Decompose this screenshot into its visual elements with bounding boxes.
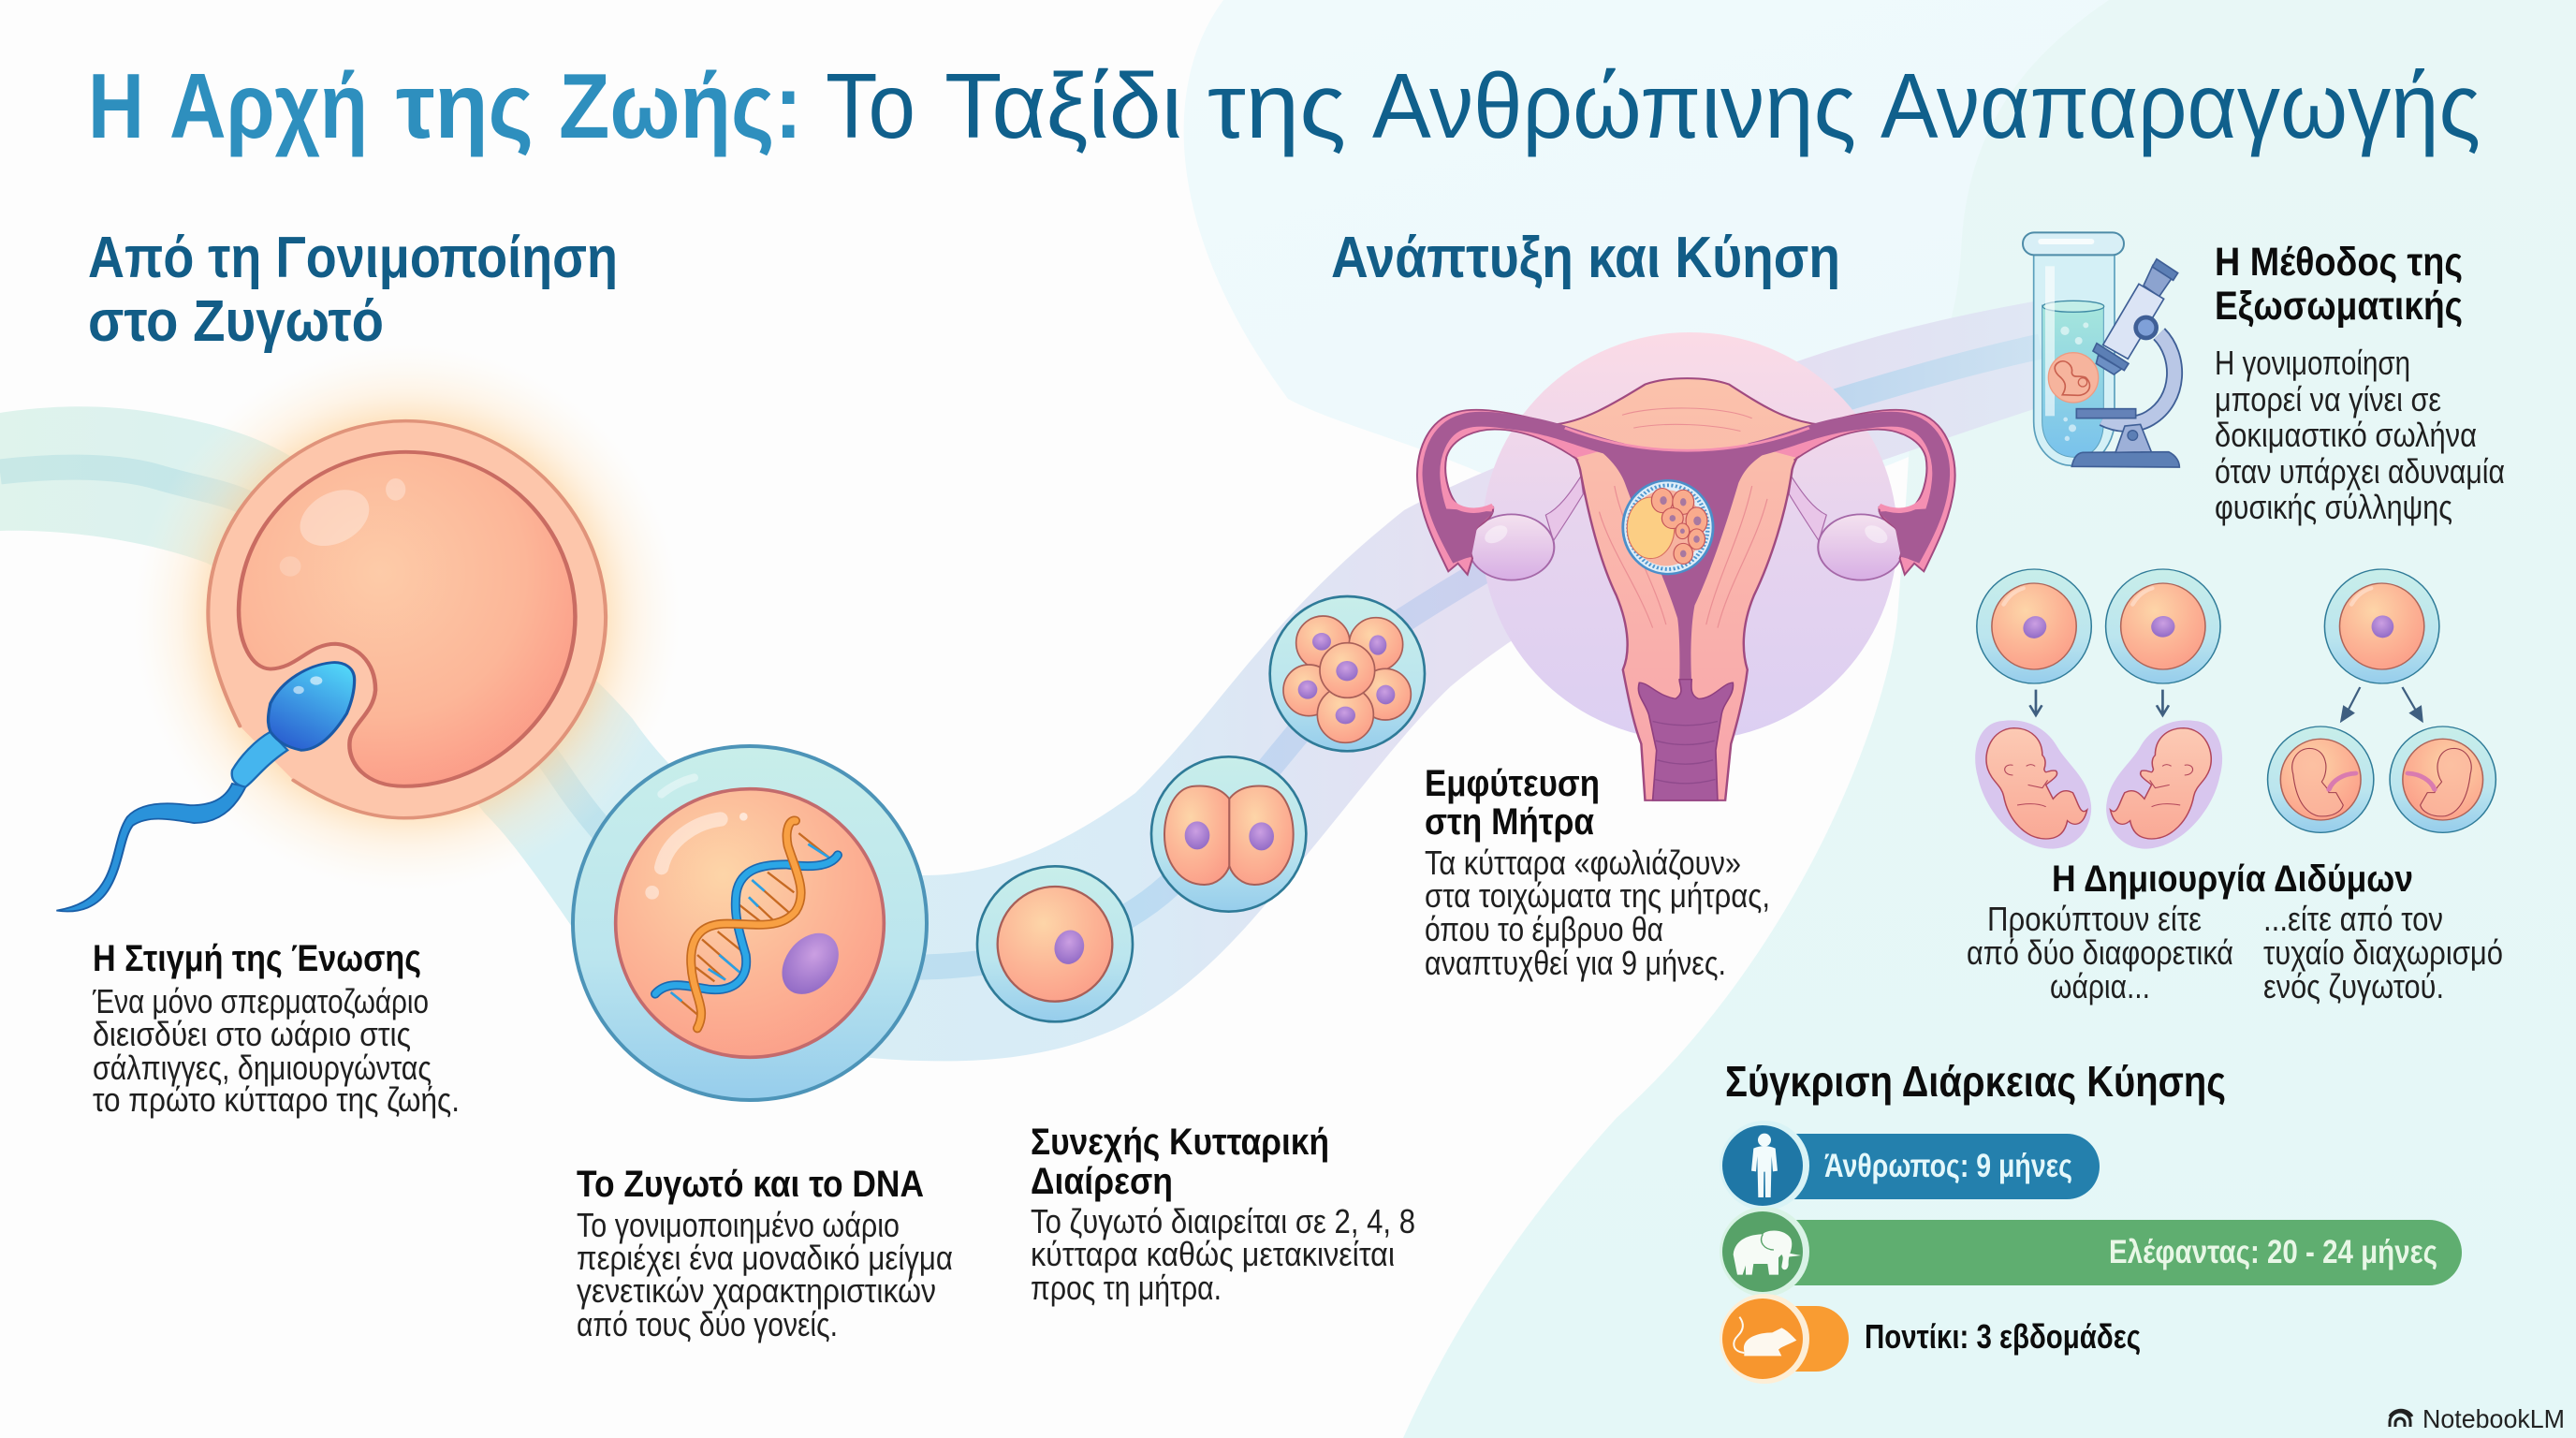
heading: from fertilization to zygote: στο Ζυγωτό — [88, 289, 384, 354]
title: Αρχή — [169, 54, 368, 157]
text block: creation of twins: τυχαίο διαχωρισμό — [2263, 933, 2503, 972]
text block: zygote and DNA: περιέχει ένα μοναδικό μείγμα — [577, 1239, 953, 1277]
identical twins — [2268, 569, 2496, 832]
text block: IVF method: Η γονιμοποίηση — [2215, 344, 2410, 382]
title: Ανθρώπινης — [1372, 54, 1856, 157]
text block: moment of union: Ένα μόνο σπερματοζωάριο — [92, 982, 429, 1020]
icon: microscope — [2071, 259, 2179, 467]
text block: IVF method: μπορεί να γίνει σε — [2215, 380, 2441, 418]
icon: uterus with implanted embryo — [1417, 378, 1955, 800]
text block: implantation: Εμφύτευση — [1425, 763, 1600, 804]
text block: continuous cell division: προς τη μήτρα. — [1031, 1269, 1222, 1307]
bar: elephant 20-24 months: Ελέφαντας: 20 - 24 μήνες — [2109, 1234, 2437, 1270]
title: της — [396, 54, 534, 157]
text block: IVF method: φυσικής σύλληψης — [2215, 488, 2452, 526]
heading: development and gestation: Ανάπτυξη και Κύηση — [1331, 226, 1840, 290]
text block: zygote and DNA: Το Ζυγωτό και το DNA — [577, 1164, 924, 1205]
backdrop circle behind uterus — [1482, 332, 1897, 741]
text block: IVF method: όταν υπάρχει αδυναμία — [2215, 452, 2505, 491]
text block: creation of twins: ενός ζυγωτού. — [2263, 967, 2444, 1005]
icon: mouse — [1734, 1317, 1796, 1356]
text block: moment of union: σάλπιγγες, δημιουργώντας — [93, 1049, 432, 1087]
title: Η — [88, 54, 144, 157]
title — [88, 54, 2481, 157]
icon: two-cell stage — [1151, 756, 1306, 912]
diagram: twin formation — [1975, 569, 2496, 849]
title: Ταξίδι — [944, 54, 1182, 157]
icon: single cell — [977, 866, 1133, 1021]
text block: creation of twins: ...είτε από τον — [2263, 900, 2443, 938]
bar: mouse 3 weeks — [1720, 1294, 2141, 1384]
heading: gestation comparison: Σύγκριση Διάρκειας Κύησης — [1725, 1057, 2226, 1106]
bar: elephant 20-24 months — [1720, 1207, 2462, 1297]
text block: moment of union: Η Στιγμή της Ένωσης — [93, 938, 421, 979]
text block: continuous cell division: Το ζυγωτό διαιρείται σε 2, 4, 8 — [1031, 1202, 1415, 1240]
text block: implantation — [1425, 763, 1770, 982]
text block: implantation: στα τοιχώματα της μήτρας, — [1425, 876, 1770, 915]
text block: creation of twins: από δύο διαφορετικά — [1967, 933, 2233, 972]
text block: moment of union: διεισδύει στο ωάριο στις — [93, 1015, 411, 1053]
text block: creation of twins: ωάρια... — [2050, 967, 2150, 1005]
flow ribbon connecting the stages — [0, 301, 2041, 1061]
text block: creation of twins: Προκύπτουν είτε — [1987, 900, 2202, 938]
icon: sperm — [56, 663, 355, 912]
title: Ζωής: — [559, 54, 802, 157]
icon: egg with glow — [134, 345, 681, 891]
title: Αναπαραγωγής — [1881, 54, 2481, 157]
text block: zygote and DNA: Το γονιμοποιημένο ωάριο — [577, 1206, 900, 1244]
heading: from fertilization to zygote: Από τη Γονιμοποίηση — [88, 226, 618, 290]
implanted blastocyst — [1623, 480, 1713, 574]
heading: from fertilization to zygote — [88, 226, 618, 354]
icon: elephant — [1734, 1231, 1801, 1275]
text block: continuous cell division: Διαίρεση — [1031, 1161, 1173, 1202]
text block: IVF method: Εξωσωματικής — [2215, 284, 2463, 329]
text block: zygote and DNA: από τους δύο γονείς. — [577, 1305, 838, 1343]
title: της — [1208, 54, 1346, 157]
bar: human 9 months: Άνθρωπος: 9 μήνες — [1824, 1148, 2072, 1184]
text block: creation of twins — [1967, 858, 2503, 1005]
text block: zygote and DNA — [577, 1164, 953, 1343]
title: Το — [826, 54, 915, 157]
text block: creation of twins: Η Δημιουργία Διδύμων — [2052, 858, 2413, 900]
icon: zygote with DNA — [573, 746, 927, 1100]
text block: IVF method: Η Μέθοδος της — [2215, 240, 2463, 285]
bar: mouse 3 weeks: Ποντίκι: 3 εβδομάδες — [1865, 1317, 2141, 1356]
text block: continuous cell division: Συνεχής Κυτταρική — [1031, 1122, 1329, 1163]
text block: continuous cell division — [1031, 1122, 1415, 1307]
text block: moment of union: το πρώτο κύτταρο της ζωής. — [93, 1080, 460, 1119]
text block: zygote and DNA: γενετικών χαρακτηριστικών — [577, 1271, 936, 1310]
logo: NotebookLM: NotebookLM — [2422, 1404, 2565, 1433]
DNA rungs — [671, 833, 830, 1016]
text block: implantation: αναπτυχθεί για 9 μήνες. — [1425, 944, 1726, 982]
text block: IVF method: δοκιμαστικό σωλήνα — [2215, 416, 2477, 454]
icon: test tube with embryo — [2023, 232, 2124, 465]
fraternal twins — [1975, 569, 2222, 849]
text block: continuous cell division: κύτταρα καθώς μετακινείται — [1031, 1235, 1395, 1273]
text block: implantation: Τα κύτταρα «φωλιάζουν» — [1425, 844, 1741, 882]
text block: implantation: στη Μήτρα — [1425, 801, 1594, 843]
bar: human 9 months — [1720, 1121, 2100, 1211]
text block: implantation: όπου το έμβρυο θα — [1425, 910, 1663, 948]
text block: moment of union — [92, 938, 460, 1119]
icon: human — [1751, 1134, 1778, 1197]
text block: IVF method — [2215, 240, 2505, 526]
icon: multi-cell stage — [1270, 596, 1425, 751]
